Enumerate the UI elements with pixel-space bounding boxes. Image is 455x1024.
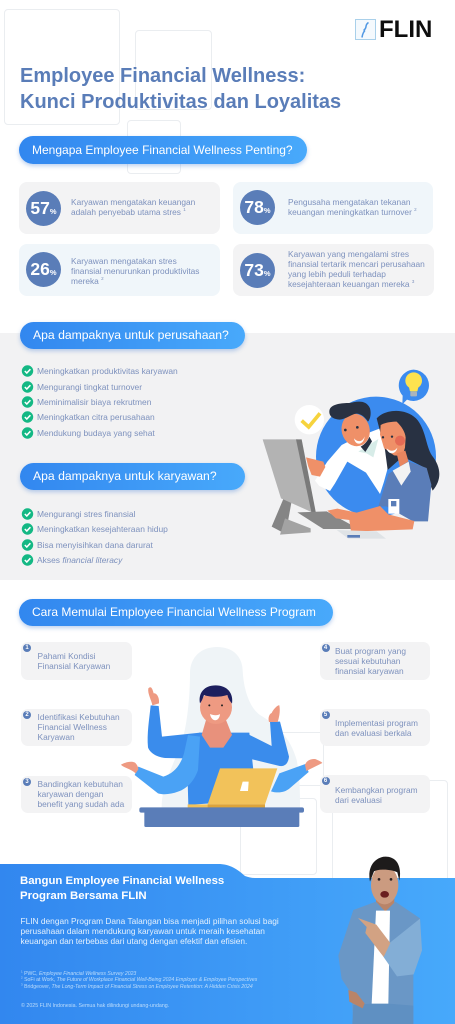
title: Kunci Produktivitas dan Loyalitas (20, 90, 341, 112)
heading: why it matters (19, 136, 307, 164)
text: Kembangkan program dari evaluasi (335, 785, 418, 805)
panel: footer background (0, 864, 455, 1024)
footer body text: perusahaan dalam mendukung karyawan untuk meraih kesehatan (20, 926, 265, 936)
item: Mengurangi tingkat turnover (37, 382, 142, 392)
stat number 73 (240, 253, 275, 288)
item: Akses financial literacy (37, 555, 122, 565)
item: Mendukung budaya yang sehat (37, 428, 155, 438)
badge 2: 2 (25, 712, 29, 718)
illustration: multitasking man at desk (121, 647, 322, 827)
heading: employee impact: Apa dampaknya untuk karyawan? (33, 469, 217, 483)
step 3 (21, 776, 132, 813)
badge 6 (322, 777, 330, 785)
item: Bisa menyisihkan dana darurat (37, 540, 153, 550)
man (306, 402, 390, 494)
step 6 (320, 775, 430, 813)
monitor (263, 439, 354, 535)
footer body text: keuangan dan terbebas dari utang dengan efektif dan efisien. (20, 936, 247, 946)
step 4 (320, 642, 430, 680)
photo: man pointing (338, 856, 422, 1024)
list: employee impact (22, 508, 168, 566)
footnotes: 2 SoFi at Work, The Future of Workplace Financial Well-Being 2024 Employer & Employee Perspectives (21, 976, 257, 983)
badge 5 (322, 710, 330, 718)
stat number 57 (26, 191, 61, 226)
logo: FLIN (355, 16, 432, 43)
lower arms (121, 735, 322, 794)
icon: lightbulb bubble (399, 370, 429, 404)
text: Pahami Kondisi Finansial Karyawan (38, 651, 110, 671)
panel: stat 73% (233, 244, 434, 296)
badge 5: 5 (324, 712, 327, 718)
panel: stat 57% (19, 182, 220, 234)
head (200, 685, 232, 748)
stat text 57: Karyawan mengatakan keuangan adalah penyebab utama stres 1 (71, 197, 195, 217)
title (20, 65, 341, 112)
badge 1 (23, 644, 31, 652)
badge 4 (322, 644, 330, 652)
heading: company impact (20, 322, 245, 349)
laptop (188, 768, 277, 808)
heading: why it matters: Mengapa Employee Financial Wellness Penting? (32, 143, 293, 157)
item: Meningkatkan kesejahteraan hidup (37, 524, 168, 534)
item: Meningkatkan produktivitas karyawan (37, 366, 178, 376)
text: Identifikasi Kebutuhan Financial Wellness Karyawan (38, 712, 120, 742)
footer body text: FLIN dengan Program Dana Talangan bisa menjadi pilihan solusi bagi (20, 916, 279, 926)
step 1 (21, 642, 132, 680)
icon: check badge (295, 405, 324, 434)
stat number 26 (26, 252, 61, 287)
badge 3 (23, 778, 31, 786)
stat number 26: 26% (30, 259, 57, 279)
item: Meminimalisir biaya rekrutmen (37, 397, 151, 407)
logo: FLIN: FLIN (379, 16, 432, 43)
torso (187, 733, 253, 805)
badge 2 (23, 711, 31, 719)
footer heading (20, 875, 224, 902)
title: Employee Financial Wellness: (20, 65, 305, 87)
footnotes (21, 969, 258, 990)
item: Meningkatkan citra perusahaan (37, 412, 155, 422)
badge 4: 4 (324, 645, 327, 651)
copyright: © 2025 FLIN Indonesia. Semua hak dilindungi undang-undang. (21, 1003, 169, 1009)
woman (327, 411, 439, 532)
footnotes: 3 Bridgeover, The Long-Term Impact of Financial Stress on Employee Retention: A Hidden Crisis 2024 (21, 982, 253, 990)
heading: employee impact (20, 463, 245, 490)
text: Buat program yang sesuai kebutuhan finansial karyawan (335, 646, 406, 676)
illustration: two colleagues at a computer (262, 370, 440, 538)
badge 3: 3 (25, 778, 29, 784)
heading: company impact: Apa dampaknya untuk perusahaan? (33, 328, 229, 342)
stat text 78: Pengusaha mengatakan tekanan keuangan meningkatkan turnover 2 (288, 197, 417, 217)
panel: stat 26% (19, 244, 220, 296)
badge 1: 1 (25, 645, 29, 651)
stat number 78: 78% (244, 197, 271, 217)
desk (139, 807, 304, 827)
raised arms (148, 687, 289, 766)
heading: how to start: Cara Memulai Employee Financial Wellness Program (32, 605, 316, 619)
step 2 (21, 709, 132, 746)
footer heading: Bangun Employee Financial Wellness (20, 875, 224, 887)
item: Mengurangi stres finansial (37, 509, 136, 519)
list: company impact (22, 365, 178, 439)
step 5 (320, 709, 430, 746)
panel: stat 78% (233, 182, 433, 234)
stat text 26: Karyawan mengatakan stres finansial menurunkan produktivitas mereka 2 (71, 256, 199, 286)
stat number 73: 73% (244, 260, 271, 280)
stat number 57: 57% (30, 198, 57, 218)
text: Implementasi program dan evaluasi berkala (335, 718, 418, 738)
heading: how to start (19, 599, 333, 626)
footer heading: Program Bersama FLIN (20, 890, 147, 902)
stat text 73: Karyawan yang mengalami stres finansial tertarik mencari perusahaan yang lebih peduli terhadap kesejahteraan keuangan mereka 3 (288, 249, 425, 289)
panel: impact band (0, 333, 455, 580)
text: Bandingkan kebutuhan karyawan dengan benefit yang sudah ada (38, 779, 124, 809)
stat number 78 (240, 190, 275, 225)
footnotes: 1 PWC, Employee Financial Wellness Survey 2023 (21, 969, 136, 977)
footer body text (20, 916, 279, 946)
badge 6: 6 (324, 778, 327, 784)
